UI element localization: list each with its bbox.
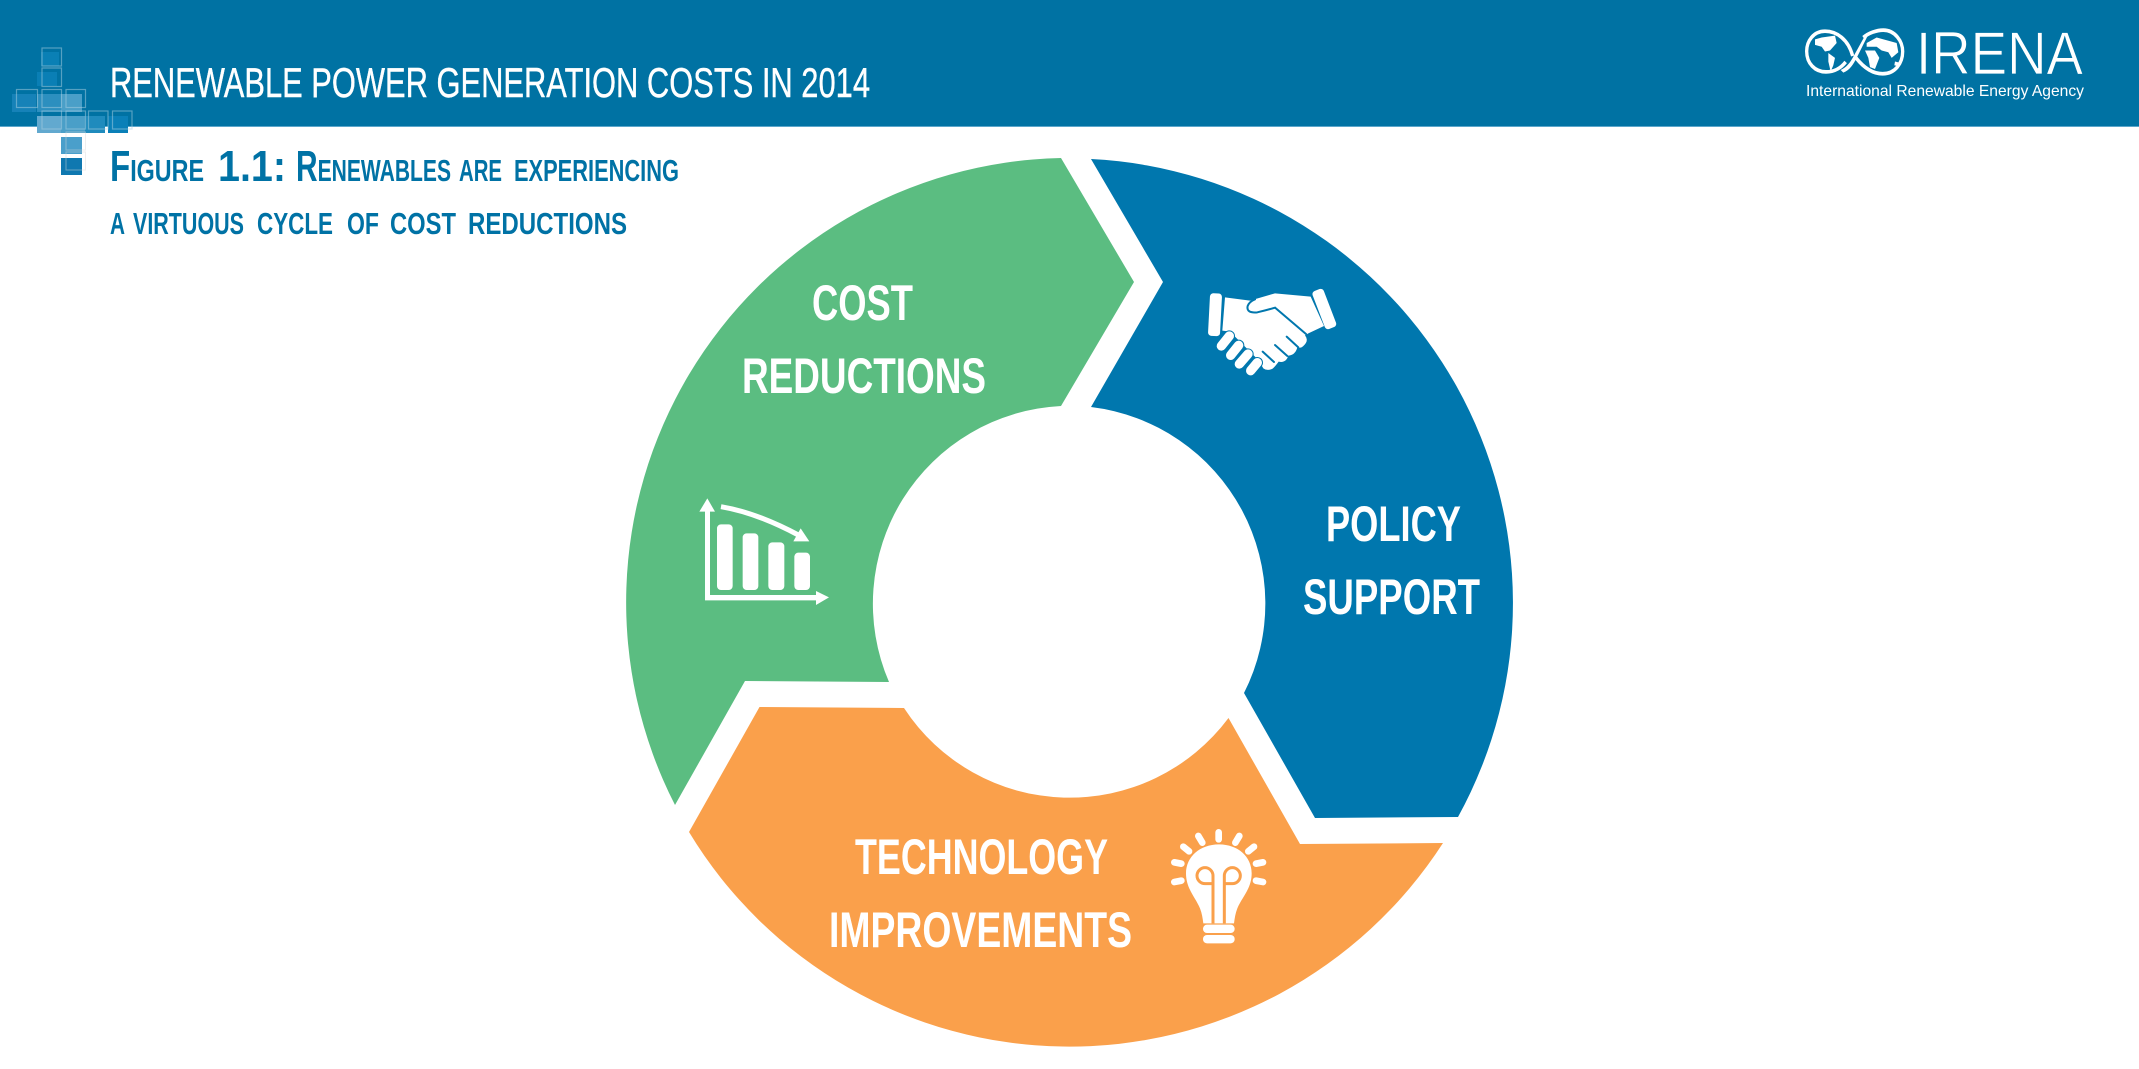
- label: policy support: POLICY: [1326, 496, 1461, 552]
- header band: [0, 0, 2139, 127]
- tagline: International Renewable Energy Agency: [1806, 83, 2084, 100]
- figure heading: virtuous: [133, 195, 244, 244]
- figure heading: [110, 142, 679, 244]
- figure heading: a: [110, 195, 125, 244]
- title: RENEWABLE POWER GENERATION COSTS IN 2014: [110, 59, 870, 106]
- figure heading: Renewables: [296, 142, 451, 191]
- label: technology improvements: IMPROVEMENTS: [829, 902, 1132, 958]
- logo: IRENA: [1806, 20, 2084, 100]
- panel: policy support: [1091, 159, 1513, 818]
- label: technology improvements: TECHNOLOGY: [855, 829, 1108, 885]
- icon: light bulb: [1174, 832, 1263, 943]
- figure heading: cost: [390, 195, 456, 244]
- label: technology improvements: [829, 829, 1132, 958]
- figure heading: reductions: [468, 195, 627, 244]
- panel: technology improvements: [689, 707, 1443, 1047]
- wordmark: IRENA: [1916, 20, 2083, 87]
- label: policy support: [1303, 496, 1480, 625]
- icon: falling bar chart: [699, 498, 829, 605]
- figure heading: experiencing: [514, 142, 679, 191]
- figure heading: Figure: [110, 142, 204, 191]
- figure heading: are: [459, 142, 502, 191]
- icon: pixel cross decoration: [12, 48, 132, 175]
- label: cost reductions: COST: [812, 275, 913, 331]
- figure heading: of: [347, 195, 379, 244]
- label: policy support: SUPPORT: [1303, 569, 1480, 625]
- icon: handshake: [1208, 288, 1337, 371]
- panel: cost reductions: [626, 158, 1134, 805]
- label: cost reductions: [742, 275, 986, 404]
- figure heading: 1.1:: [218, 142, 286, 191]
- label: cost reductions: REDUCTIONS: [742, 348, 986, 404]
- icon: infinity globe: [1807, 30, 1903, 74]
- figure heading: cycle: [257, 195, 333, 244]
